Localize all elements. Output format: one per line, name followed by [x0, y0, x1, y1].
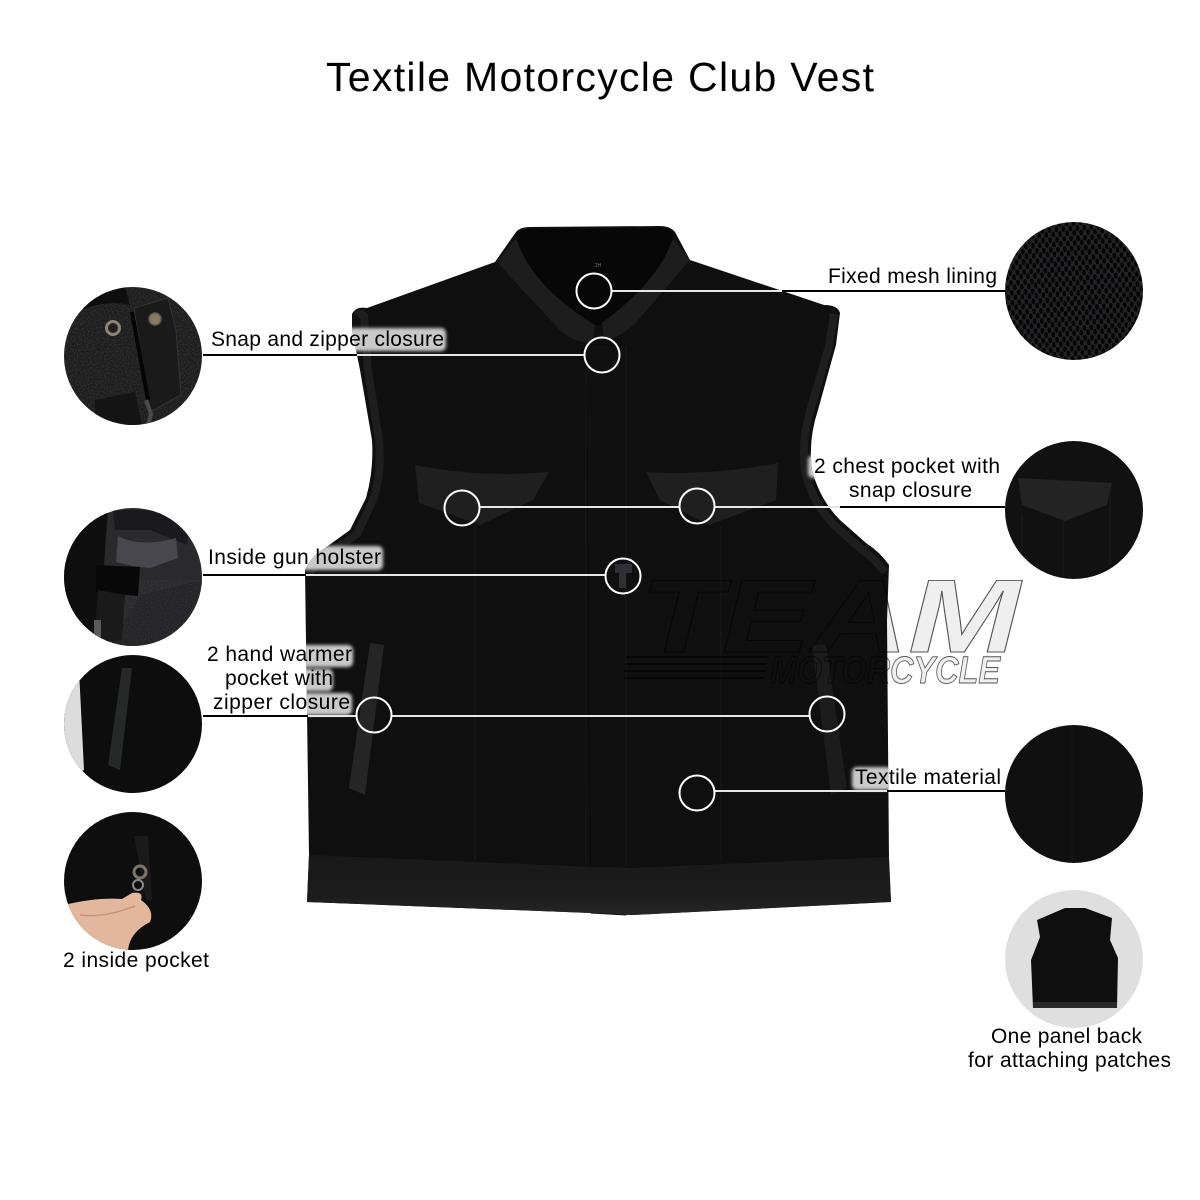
vest body	[305, 226, 891, 915]
caption: one panel back for attaching patches: for attaching patches	[968, 1049, 1171, 1072]
hem	[1033, 1002, 1117, 1008]
gun	[116, 536, 178, 568]
lining	[110, 580, 202, 646]
seam	[1072, 725, 1073, 863]
label: snap closure	[849, 479, 972, 502]
leader line	[203, 354, 357, 356]
marker right	[680, 488, 714, 524]
leader line	[479, 506, 840, 508]
callout: 2 chest pocket with snap closure	[444, 455, 1005, 526]
background wedge	[64, 680, 84, 771]
right hand warmer pocket	[812, 645, 847, 795]
photo: hand warmer pocket	[60, 650, 202, 793]
marker left	[444, 490, 480, 526]
label: Inside gun holster	[208, 546, 381, 569]
logo speed stripes	[624, 657, 768, 678]
label halos on vest	[300, 328, 892, 790]
holster detail	[615, 564, 632, 588]
snap stud	[149, 313, 161, 325]
zipper	[132, 312, 148, 400]
caption: one panel back for attaching patches: One panel back	[991, 1025, 1142, 1048]
caption: 2 inside pocket: 2 inside pocket	[63, 949, 209, 972]
callout: fixed mesh lining	[576, 265, 1005, 308]
collar inner	[516, 228, 674, 325]
left chest pocket flap	[415, 465, 549, 525]
photo: snap and zipper closure	[64, 287, 202, 425]
seams	[1022, 490, 1110, 579]
hem band	[307, 855, 891, 915]
label	[814, 455, 1000, 502]
label: Fixed mesh lining	[828, 265, 997, 288]
leader line	[203, 715, 308, 717]
photo: inside pocket	[60, 812, 202, 950]
marker	[576, 274, 612, 308]
left hand warmer pocket	[349, 643, 384, 795]
watermark logo	[624, 559, 1023, 692]
logo word MOTORCYCLE: MOTORCYCLE	[770, 650, 1001, 692]
hand	[60, 893, 151, 950]
marker	[680, 776, 714, 810]
callout: snap and zipper closure	[203, 328, 620, 372]
flap	[1018, 478, 1112, 521]
leader line	[611, 290, 782, 292]
photo: inside gun holster	[64, 508, 202, 650]
logo word TEAM: TEAM	[640, 559, 1023, 675]
right chest pocket flap	[646, 463, 778, 525]
photo: textile material	[1005, 725, 1143, 863]
photo: one panel back	[1005, 890, 1143, 1028]
collar shadow	[82, 288, 130, 310]
pocket edge	[95, 392, 142, 425]
label: 2 hand warmer	[207, 643, 352, 666]
right armhole binding	[804, 314, 885, 572]
placket	[586, 345, 626, 915]
collar band right	[602, 238, 690, 338]
leader line	[715, 790, 887, 792]
zipper strip	[108, 668, 132, 770]
snap socket	[106, 322, 120, 334]
marker	[584, 338, 620, 372]
vest front	[305, 226, 891, 915]
placket flap	[134, 298, 181, 412]
seams	[475, 345, 721, 868]
strap	[102, 565, 140, 596]
left armhole binding	[309, 314, 380, 574]
callout: inside gun holster	[203, 546, 640, 594]
label: 2 chest pocket with	[814, 455, 1000, 478]
collar band left	[497, 238, 595, 342]
photo: mesh lining	[1005, 222, 1143, 360]
marker left	[356, 698, 392, 732]
label: Textile material	[855, 766, 1001, 789]
zipper	[134, 836, 152, 900]
label	[207, 643, 352, 714]
zipper pull	[134, 866, 146, 878]
back of vest	[1031, 908, 1118, 1008]
marker right	[810, 696, 844, 732]
dark left panel	[64, 512, 108, 637]
photo: chest pocket	[1005, 441, 1143, 579]
label: Snap and zipper closure	[211, 328, 444, 351]
holster top	[113, 510, 190, 545]
callout: 2 hand warmer pocket with zipper closure	[203, 643, 844, 732]
marker	[606, 558, 640, 594]
label: pocket with	[225, 667, 333, 690]
title: Textile Motorcycle Club Vest	[326, 54, 875, 100]
label: zipper closure	[213, 691, 350, 714]
callout: textile material	[680, 766, 1005, 810]
leader line	[203, 574, 306, 576]
size tag: 2H	[595, 263, 602, 269]
caption: one panel back for attaching patches	[968, 1025, 1171, 1072]
